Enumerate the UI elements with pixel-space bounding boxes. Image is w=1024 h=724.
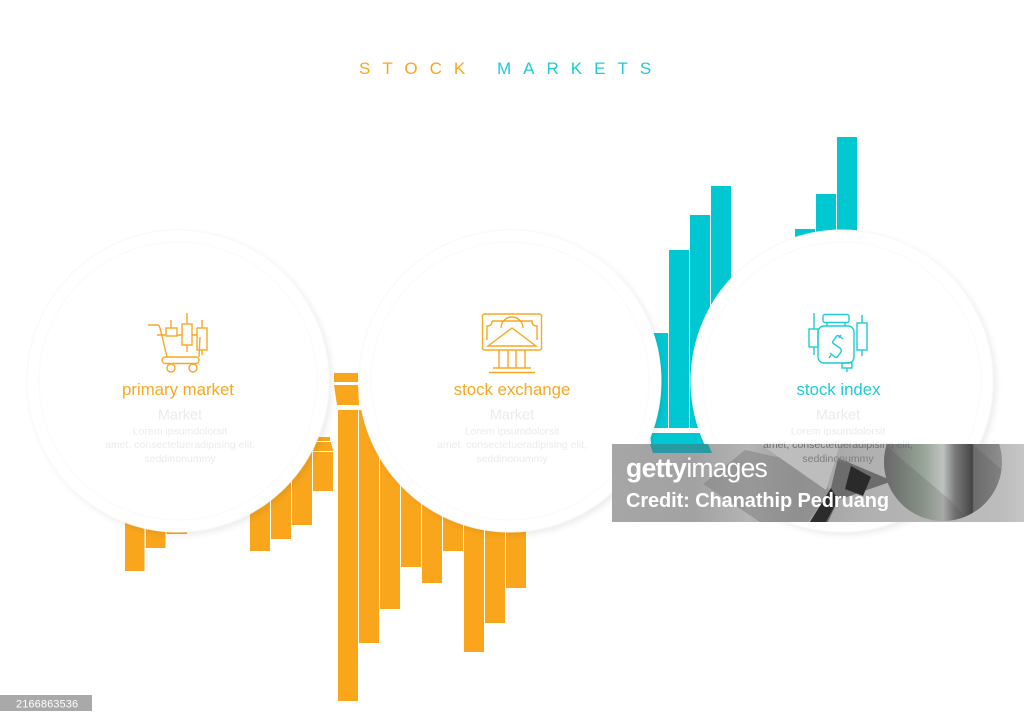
- title: [359, 59, 663, 78]
- watermark band: amet, consectetueradipising elit,: [763, 439, 913, 451]
- text block: stock index body: [763, 408, 913, 465]
- panel: stock index: [691, 230, 993, 532]
- heading: stock exchange: stock exchange: [454, 380, 570, 399]
- text block: stock exchange body: [437, 408, 587, 465]
- text block: primary market body: Market: [158, 408, 202, 424]
- bar chart: orange: [125, 373, 526, 701]
- panel: primary market: [27, 230, 329, 532]
- text block: stock exchange body: seddinonummy: [476, 453, 548, 465]
- image id label: [0, 695, 92, 711]
- icon: dollar candlesticks: [809, 313, 867, 372]
- watermark band: seddinonummy: [802, 453, 874, 465]
- text block: primary market body: Lorem ipsumdolorsit: [133, 426, 227, 438]
- text block: primary market body: seddinonummy: [144, 453, 216, 465]
- heading: primary market: primary market: [122, 380, 234, 399]
- text block: stock index body: seddinonummy: [802, 453, 874, 465]
- text block: stock index body: amet, consectetueradipising elit,: [763, 439, 913, 451]
- title: MARKETS: [497, 59, 663, 78]
- text block: primary market body: amet, consectetueradipising elit,: [105, 439, 255, 451]
- text block: stock exchange body: Market: [490, 408, 534, 424]
- text block: stock exchange body: Lorem ipsumdolorsit: [465, 426, 559, 438]
- watermark: credit line: Credit: Chanathip Pedruang: [626, 490, 889, 512]
- text block: stock index body: Lorem ipsumdolorsit: [791, 426, 885, 438]
- text block: primary market body: [105, 408, 255, 465]
- image id label: 2166863536: [16, 698, 78, 710]
- bar chart: teal: [648, 137, 857, 453]
- panel: stock exchange: [359, 230, 661, 532]
- text block: stock index body: Market: [816, 408, 860, 424]
- text block: stock exchange body: amet, consectetueradipising elit,: [437, 439, 587, 451]
- heading: stock index: stock index: [797, 380, 881, 399]
- title: STOCK: [359, 59, 477, 78]
- icon: shopping cart with candlesticks: [148, 313, 207, 372]
- watermark band: [612, 444, 1024, 522]
- watermark: getty images logo: gettyimages: [626, 453, 768, 483]
- icon: bank with banknote: [482, 314, 542, 372]
